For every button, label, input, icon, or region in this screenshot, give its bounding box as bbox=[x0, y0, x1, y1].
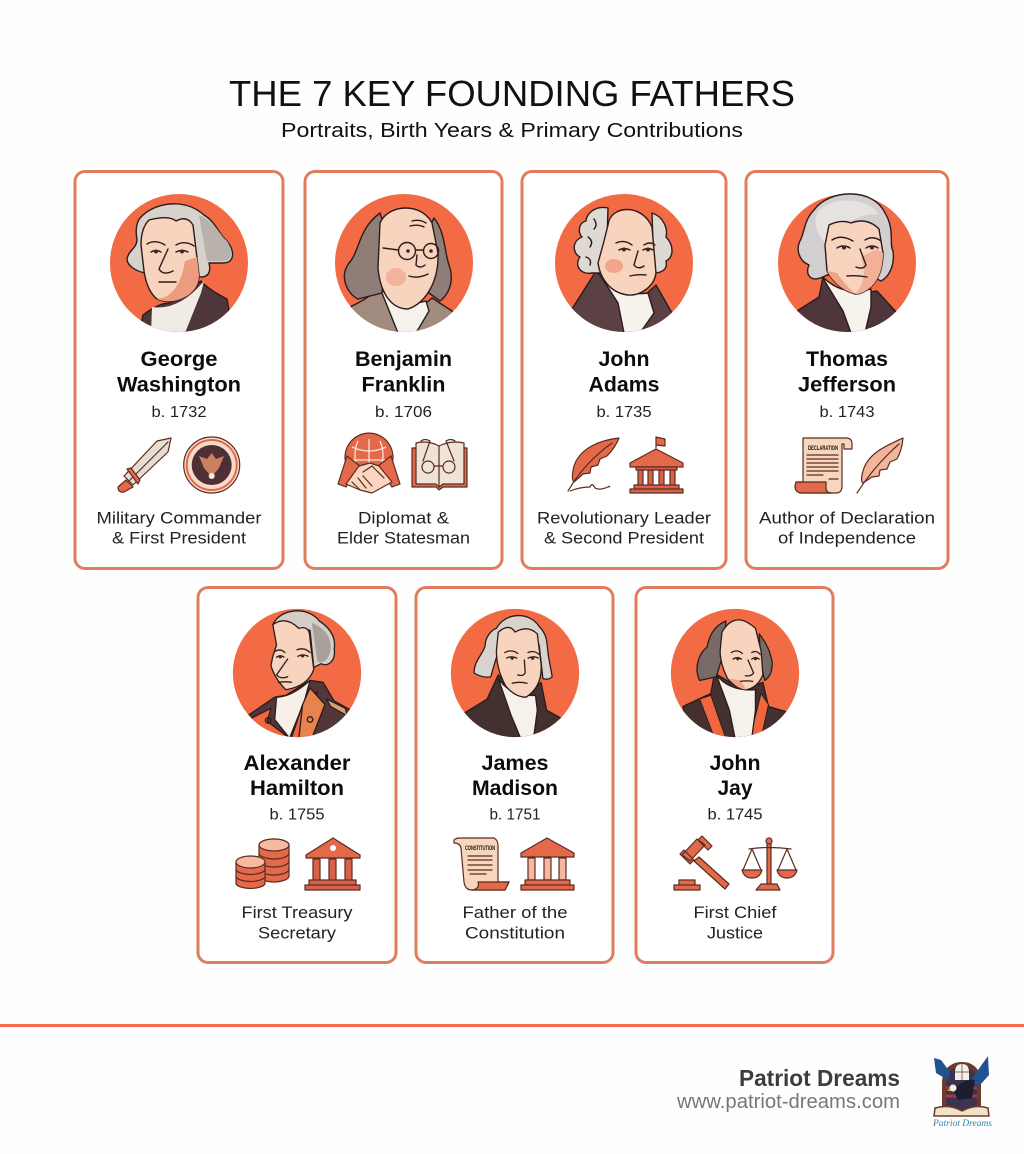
name: Franklin bbox=[362, 374, 446, 396]
name: Madison bbox=[472, 777, 558, 800]
birth year: b. 1735 bbox=[596, 404, 652, 421]
portrait: George Washington bbox=[110, 194, 248, 333]
name: Alexander bbox=[244, 752, 350, 775]
portrait: John Adams bbox=[555, 194, 693, 333]
role: & First President bbox=[112, 528, 246, 548]
subtitle: Portraits, Birth Years & Primary Contributions bbox=[281, 120, 743, 142]
name bbox=[244, 752, 350, 800]
panel: John Adams bbox=[522, 172, 726, 568]
footer divider line bbox=[0, 1024, 1024, 1027]
name: Jefferson bbox=[798, 374, 896, 396]
role bbox=[694, 903, 777, 942]
title: THE 7 KEY FOUNDING FATHERS bbox=[229, 73, 795, 114]
birth year: b. 1751 bbox=[490, 806, 541, 824]
logo: Patriot Dreams eagle and book: Patriot Dreams bbox=[932, 1118, 993, 1128]
panel: Thomas Jefferson bbox=[746, 172, 948, 568]
role: Military Commander bbox=[96, 508, 262, 528]
portrait: Benjamin Franklin bbox=[335, 194, 473, 333]
role: Revolutionary Leader bbox=[537, 508, 711, 528]
name: Thomas bbox=[806, 348, 888, 371]
icon: scales of justice bbox=[742, 838, 797, 890]
name: James bbox=[482, 752, 548, 775]
role: First Chief bbox=[694, 903, 777, 922]
role bbox=[462, 903, 568, 942]
name: Hamilton bbox=[250, 777, 344, 800]
icon: book and glasses bbox=[412, 440, 467, 490]
role bbox=[96, 508, 262, 548]
footer brand text: Patriot Dreams bbox=[739, 1065, 900, 1091]
name bbox=[472, 752, 558, 800]
icon: coins bbox=[236, 839, 289, 888]
role bbox=[537, 508, 711, 548]
icon: sword bbox=[118, 438, 171, 492]
portrait: James Madison bbox=[451, 609, 579, 738]
portrait: John Jay bbox=[671, 609, 799, 738]
role: Author of Declaration bbox=[759, 508, 935, 528]
icon: globe and handshake bbox=[338, 433, 400, 493]
role: Secretary bbox=[258, 924, 337, 942]
role: First Treasury bbox=[242, 903, 353, 922]
name: Jay bbox=[718, 777, 753, 800]
icon: declaration scroll bbox=[795, 438, 852, 493]
icon: quill and signature bbox=[568, 438, 619, 491]
role bbox=[337, 508, 470, 548]
birth year: b. 1743 bbox=[820, 404, 875, 421]
panel: George Washington bbox=[75, 172, 283, 568]
birth year: b. 1732 bbox=[152, 404, 207, 421]
role: Justice bbox=[707, 924, 763, 942]
footer brand text: www.patriot-dreams.com bbox=[676, 1091, 900, 1113]
icon: government building with flag bbox=[630, 437, 683, 493]
birth year: b. 1745 bbox=[708, 806, 763, 824]
icon: constitution scroll bbox=[454, 838, 509, 890]
icon: gavel bbox=[674, 836, 729, 890]
icon: pale quill bbox=[857, 438, 903, 493]
role: Elder Statesman bbox=[337, 528, 470, 548]
portrait: Alexander Hamilton bbox=[233, 609, 361, 738]
name bbox=[117, 348, 241, 396]
footer brand text bbox=[676, 1065, 900, 1113]
panel: James Madison bbox=[416, 588, 613, 962]
role: & Second President bbox=[544, 528, 704, 548]
panel: John Jay bbox=[636, 588, 833, 962]
role: Diplomat & bbox=[358, 508, 450, 528]
icon: columned building bbox=[521, 838, 574, 890]
role: Constitution bbox=[465, 924, 565, 942]
role: of Independence bbox=[778, 528, 916, 548]
panel: Alexander Hamilton bbox=[198, 588, 396, 962]
name: Washington bbox=[117, 374, 241, 396]
panel: Benjamin Franklin bbox=[305, 172, 502, 568]
name bbox=[710, 752, 760, 800]
name bbox=[355, 348, 452, 396]
birth year: b. 1755 bbox=[270, 806, 325, 824]
name: John bbox=[710, 752, 760, 775]
name bbox=[798, 348, 896, 396]
name: Adams bbox=[588, 374, 660, 396]
icon: declaration scroll: DECLARATION bbox=[808, 446, 838, 452]
name bbox=[588, 348, 660, 396]
icon: presidential seal bbox=[184, 437, 240, 493]
role: Father of the bbox=[462, 903, 568, 922]
name: George bbox=[140, 348, 218, 371]
birth year: b. 1706 bbox=[375, 404, 432, 421]
logo: Patriot Dreams eagle and book bbox=[932, 1056, 993, 1128]
icon: constitution scroll: CONSTITUTION bbox=[465, 846, 495, 852]
role bbox=[242, 903, 353, 942]
portrait: Thomas Jefferson bbox=[778, 194, 916, 333]
name: John bbox=[598, 348, 650, 371]
name: Benjamin bbox=[355, 348, 452, 371]
role bbox=[759, 508, 935, 548]
icon: treasury building bbox=[305, 838, 360, 890]
